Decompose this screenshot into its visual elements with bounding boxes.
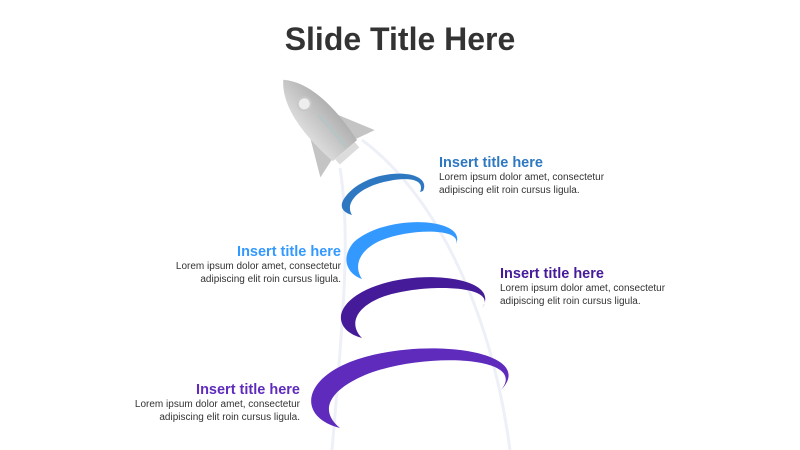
ring 1 [342, 174, 424, 215]
trail lines [332, 140, 510, 450]
text block 4: Lorem ipsum dolor amet, consectetur [135, 399, 300, 410]
text block 1: Lorem ipsum dolor amet, consectetur [439, 172, 604, 183]
text block 2: adipiscing elit roin cursus ligula. [200, 274, 341, 284]
ring 4 [311, 348, 509, 428]
text block 4 [135, 382, 300, 422]
ring 2 [346, 222, 457, 279]
text block 1: Insert title here [439, 155, 543, 171]
text block 3: adipiscing elit roin cursus ligula. [500, 296, 641, 306]
text block 3: Insert title here [500, 266, 604, 282]
title: Slide Title Here [285, 21, 515, 57]
text block 2 [176, 244, 341, 284]
ring 3 [341, 277, 485, 338]
text block 3 [500, 266, 665, 306]
icon: rocket [256, 56, 377, 180]
text block 3: Lorem ipsum dolor amet, consectetur [500, 283, 665, 294]
text block 4: adipiscing elit roin cursus ligula. [159, 412, 300, 422]
text block 1: adipiscing elit roin cursus ligula. [439, 184, 580, 196]
text block 2: Insert title here [237, 244, 341, 260]
text block 1 [439, 155, 604, 196]
text block 2: Lorem ipsum dolor amet, consectetur [176, 261, 341, 272]
text block 4: Insert title here [196, 382, 300, 398]
